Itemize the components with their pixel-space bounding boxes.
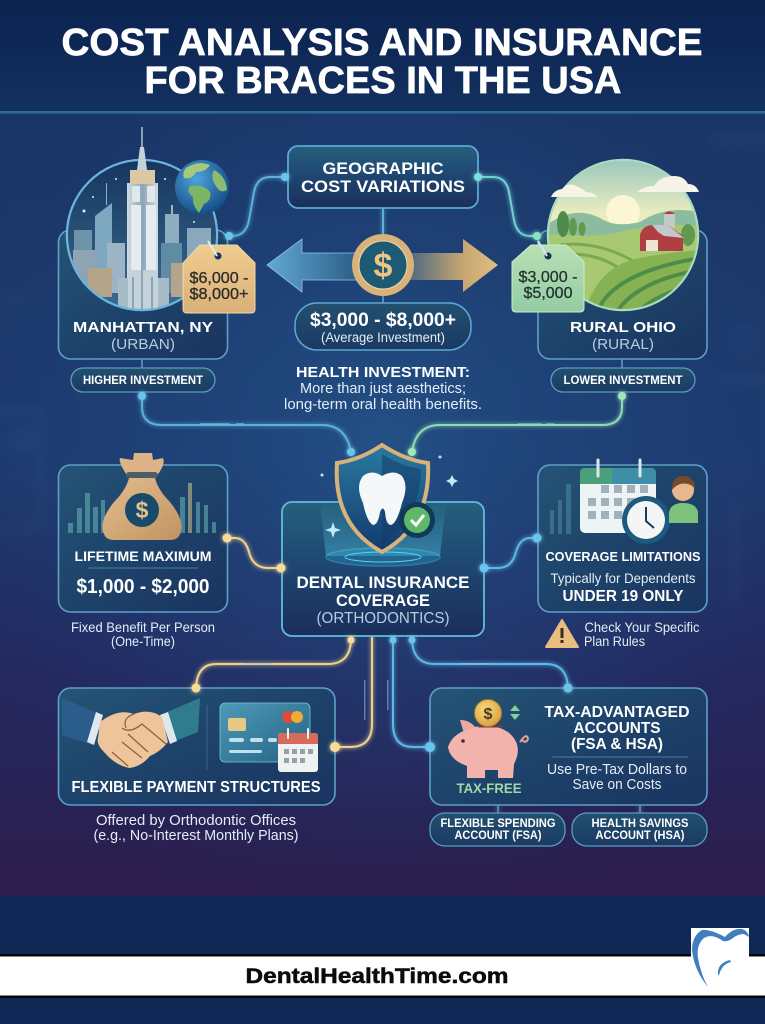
- icon: money bag: $: [136, 497, 149, 523]
- title: COST ANALYSIS AND INSURANCE: [62, 22, 702, 64]
- pill: health savings account: HEALTH SAVINGS: [592, 818, 689, 830]
- note: fixed benefit: Fixed Benefit Per Person: [71, 619, 215, 635]
- icon: shield with tooth: [326, 445, 440, 566]
- icon: credit card: [220, 703, 310, 762]
- label: Manhattan: (URBAN): [111, 336, 175, 353]
- label: rural Ohio: [570, 319, 676, 353]
- price tag: rural: $3,000 -: [518, 269, 578, 286]
- panel: geographic cost variations: [288, 146, 478, 208]
- note: offered by orthodontic offices: [94, 813, 298, 844]
- text block: health investment: HEALTH INVESTMENT:: [296, 364, 470, 381]
- price tag: urban: $6,000 -: [190, 270, 248, 287]
- icon: up down arrows: [510, 705, 520, 720]
- panel: lifetime maximum: $1,000 - $2,000: [76, 576, 210, 598]
- panel: dental insurance coverage: [282, 445, 484, 636]
- pill: flexible spending account: FLEXIBLE SPENDING: [440, 818, 556, 830]
- icon: dollar coin: [352, 234, 414, 296]
- note: check plan rules: [546, 619, 700, 649]
- pill: flexible spending account: [430, 813, 565, 846]
- pill: average investment: [295, 296, 471, 350]
- icon: handshake: [62, 698, 200, 768]
- label: rural Ohio: RURAL OHIO: [570, 319, 676, 336]
- panel: dental insurance coverage: COVERAGE: [336, 591, 430, 610]
- icon: piggy bank: [448, 720, 528, 778]
- arrow: right, lower cost: [410, 239, 498, 292]
- footer website: DentalHealthTime.com: [246, 965, 508, 988]
- connector lines: [142, 177, 640, 813]
- icon: dollar coin: $: [374, 247, 393, 285]
- decorative data bars: [68, 483, 216, 533]
- icon: globe: [175, 160, 229, 214]
- panel: coverage limitations: UNDER 19 ONLY: [562, 588, 684, 605]
- icon: calendar: [580, 460, 656, 533]
- panel: rural Ohio: [512, 160, 707, 359]
- price tag: urban: $8,000+: [190, 286, 248, 303]
- pill: lower investment: [551, 359, 695, 392]
- icon: coin: [474, 700, 502, 726]
- note: offered by orthodontic offices: Offered by Orthodontic Offices: [96, 813, 296, 829]
- note: offered by orthodontic offices: (e.g., No-Interest Monthly Plans): [94, 828, 298, 844]
- label: rural Ohio: (RURAL): [592, 336, 654, 353]
- panel: coverage limitations: [538, 460, 707, 612]
- label: Manhattan: MANHATTAN, NY: [73, 319, 213, 336]
- panel: tax-advantaged accounts: (FSA & HSA): [571, 736, 663, 753]
- note: fixed benefit: [71, 619, 215, 649]
- panel: dental insurance coverage: DENTAL INSURANCE: [296, 573, 470, 592]
- label: Manhattan: [73, 319, 213, 353]
- title: [62, 22, 702, 102]
- panel: tax-advantaged accounts: Use Pre-Tax Dollars to: [547, 762, 687, 778]
- panel: tax-advantaged accounts: TAX-FREE: [456, 781, 522, 796]
- panel: lifetime maximum: [58, 453, 228, 612]
- panel: geographic cost variations: COST VARIATIONS: [301, 178, 465, 196]
- text block: health investment: [284, 364, 482, 413]
- connector dots: [138, 173, 626, 752]
- logo: tooth: [691, 928, 749, 987]
- footer band: [0, 954, 765, 998]
- panel: lifetime maximum: LIFETIME MAXIMUM: [74, 548, 212, 564]
- panel: tax-advantaged accounts: Save on Costs: [572, 777, 662, 793]
- panel: tax-advantaged accounts: TAX-ADVANTAGED: [544, 704, 690, 721]
- title banner: [0, 0, 765, 114]
- icon: person: [669, 476, 698, 523]
- price tag: rural: [512, 241, 584, 312]
- price tag: rural: $5,000: [524, 285, 573, 302]
- arrow: left, higher cost: [267, 239, 356, 292]
- price tag: urban: [183, 241, 255, 313]
- icon: warning triangle: [546, 620, 578, 647]
- text block: health investment: More than just aesthetics;: [300, 380, 466, 397]
- pill: health savings account: ACCOUNT (HSA): [596, 830, 685, 842]
- panel: tax-advantaged accounts: ACCOUNTS: [574, 720, 660, 737]
- icon: coin: $: [484, 706, 493, 723]
- note: check plan rules: Check Your Specific: [584, 619, 700, 635]
- icon: payment calendar: [278, 729, 318, 772]
- text block: health investment: long-term oral health benefits.: [284, 396, 482, 413]
- note: fixed benefit: (One-Time): [111, 633, 175, 649]
- icon: money bag: [102, 453, 182, 540]
- central panel background: [0, 113, 765, 896]
- pill: average investment: (Average Investment): [321, 330, 445, 345]
- panel: geographic cost variations: GEOGRAPHIC: [322, 160, 444, 178]
- pill: flexible spending account: ACCOUNT (FSA): [454, 830, 542, 842]
- panel: tax-advantaged accounts: [430, 688, 707, 805]
- icon: farm landscape in circle: [548, 160, 700, 310]
- panel: coverage limitations: Typically for Dependents: [550, 570, 696, 586]
- pill: lower investment: LOWER INVESTMENT: [564, 373, 683, 387]
- panel: dental insurance coverage: (ORTHODONTICS): [316, 610, 450, 627]
- title: FOR BRACES IN THE USA: [144, 60, 622, 102]
- panel: Manhattan urban: [58, 127, 255, 359]
- panel: coverage limitations: COVERAGE LIMITATIONS: [546, 549, 701, 564]
- decorative data bars: [550, 484, 571, 534]
- pill: health savings account: [572, 813, 707, 846]
- icon: clock: [622, 496, 670, 544]
- pill: average investment: $3,000 - $8,000+: [310, 310, 456, 331]
- panel: flexible payment structures: [58, 688, 335, 805]
- pill: higher investment: HIGHER INVESTMENT: [83, 373, 204, 387]
- panel: flexible payment structures: FLEXIBLE PAYMENT STRUCTURES: [72, 779, 320, 796]
- icon: city skyline in circle: [66, 127, 218, 312]
- note: check plan rules: Plan Rules: [584, 633, 645, 649]
- pill: higher investment: [71, 359, 215, 392]
